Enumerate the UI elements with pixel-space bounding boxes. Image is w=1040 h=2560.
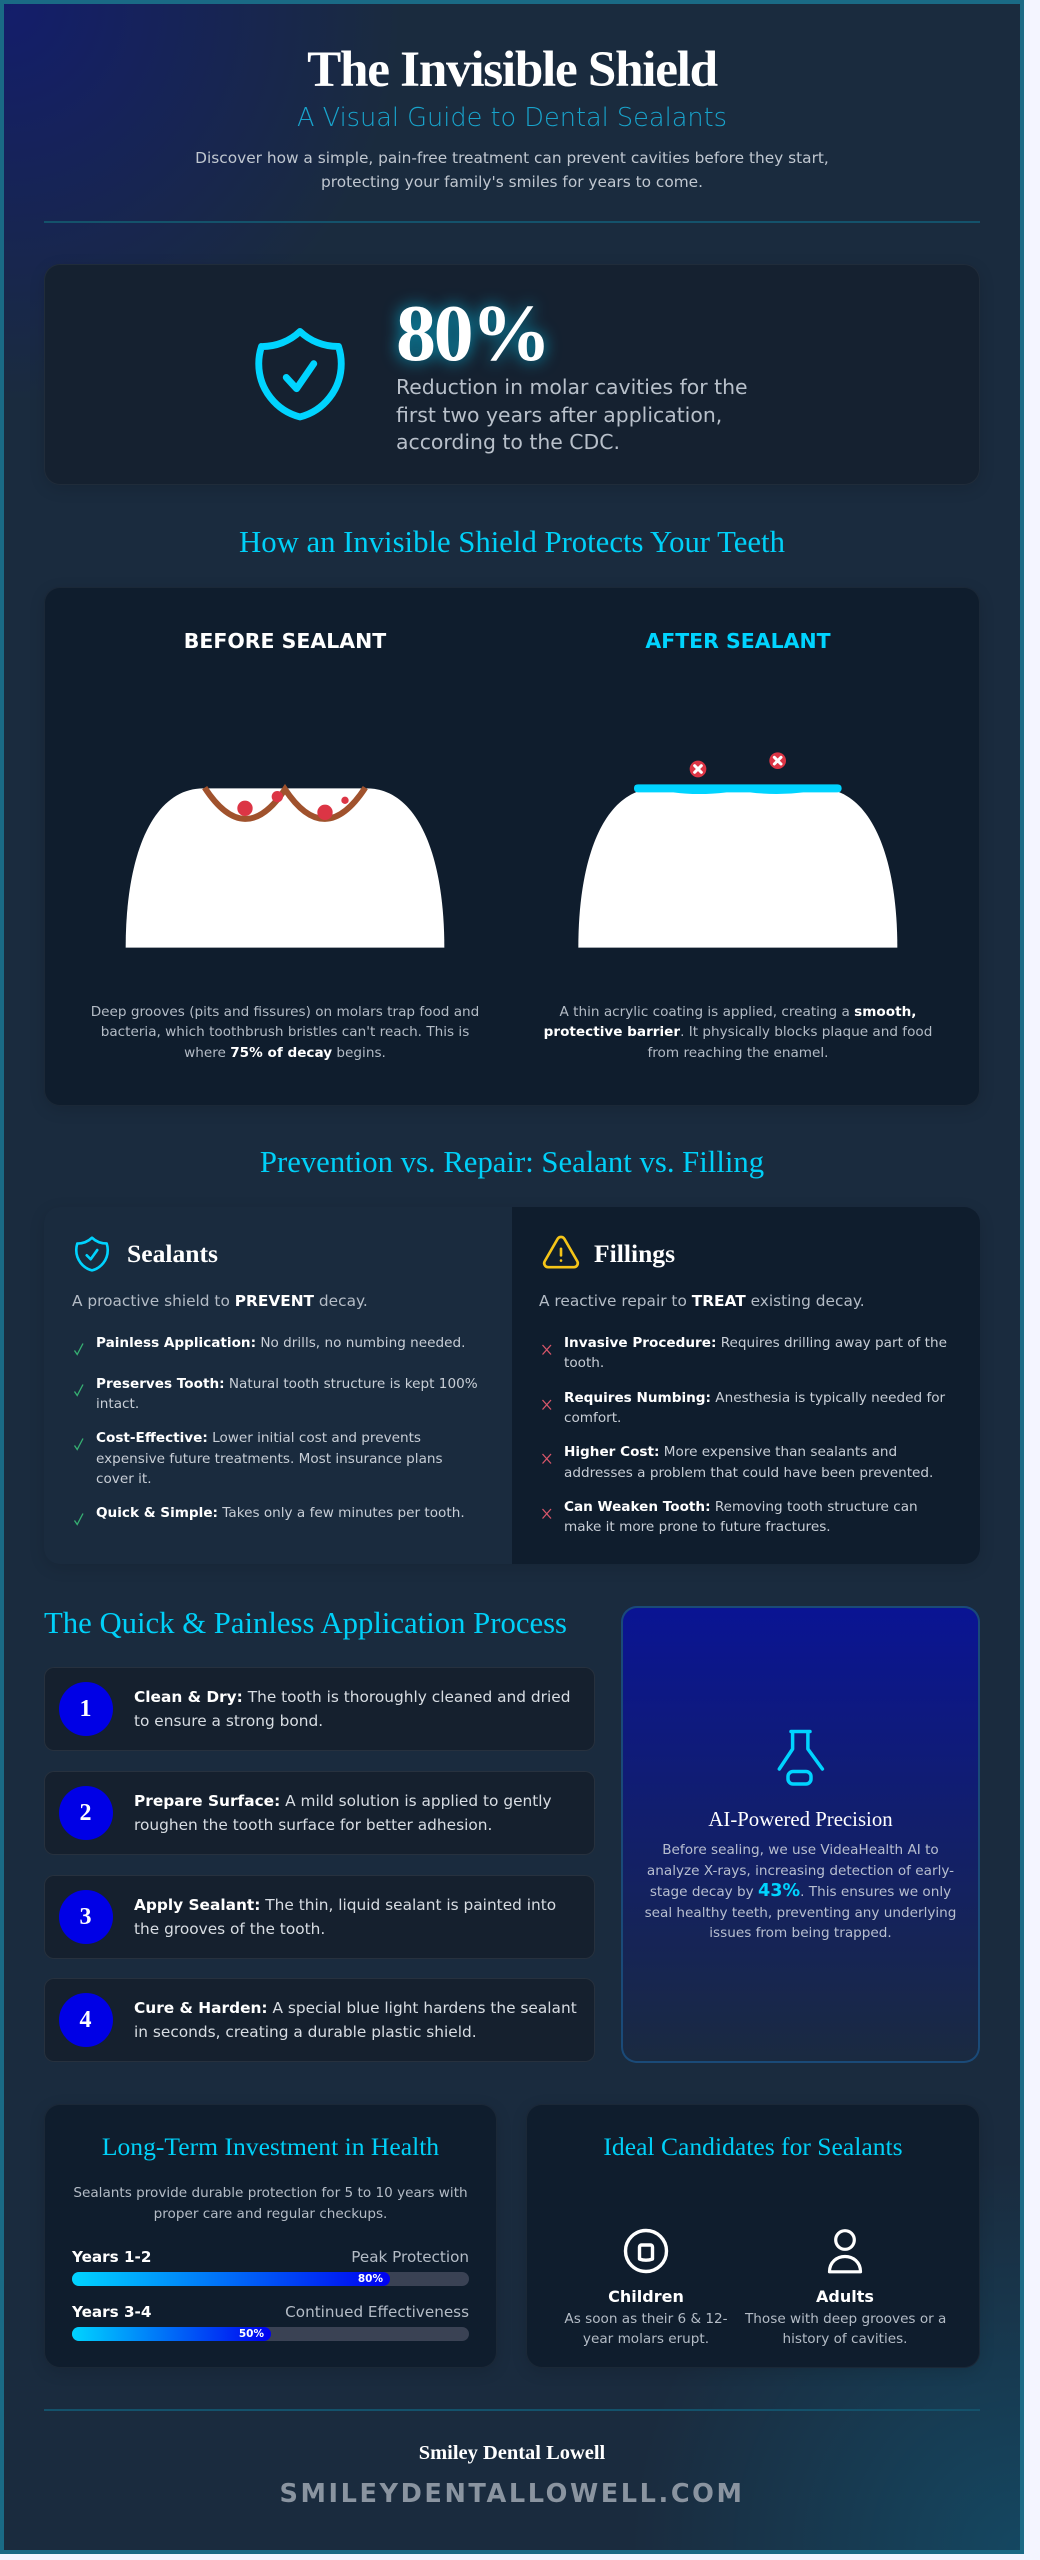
panel: AI-powered precision: [621, 1606, 980, 2063]
step text 1: [134, 1688, 570, 1730]
long-term description: [73, 2185, 468, 2222]
step text 1: to ensure a strong bond.: [134, 1712, 323, 1730]
long-term heading: Long-Term Investment in Health: [102, 2132, 439, 2161]
intro text: protecting your family's smiles for years to come.: [321, 173, 703, 191]
step text 3: [134, 1896, 556, 1938]
filling drawback 2: Requires Numbing: Anesthesia is typically needed for: [564, 1390, 945, 1406]
label: years 1-2: Peak Protection: [351, 2248, 469, 2266]
panel: before and after sealant: [44, 586, 980, 1106]
filling drawback 4: Can Weaken Tooth: Removing tooth structure can: [564, 1499, 918, 1515]
label: years 1-2: Years 1-2: [72, 2248, 151, 2266]
step text 2: roughen the tooth surface for better adhesion.: [134, 1816, 492, 1834]
step number 3: [58, 1890, 112, 1944]
AI card text: stage decay by 43%. This ensures we only: [650, 1881, 951, 1901]
filling drawback 1: Invasive Procedure: Requires drilling away part of the: [564, 1335, 947, 1351]
AI card text: seal healthy teeth, preventing any underlying: [645, 1905, 956, 1921]
heading: prevention vs repair: Prevention vs. Repair: Sealant vs. Filling: [260, 1145, 764, 1179]
column: fillings: [512, 1207, 980, 1564]
children label: Children: [608, 2286, 684, 2306]
before sealant heading: BEFORE SEALANT: [184, 629, 386, 653]
fillings summary: A reactive repair to TREAT existing decay.: [539, 1292, 865, 1310]
caption: after: protective barrier. It physically blocks plaque and food: [544, 1024, 932, 1040]
progress bar: years 1-2, 80%: [72, 2272, 469, 2286]
filling drawback 3: [542, 1444, 933, 1481]
sealant benefit 3: expensive future treatments. Most insurance plans: [96, 1451, 443, 1467]
column: sealants: [72, 1236, 478, 1526]
icon: flask: [778, 1730, 824, 1786]
caption: after: [544, 1004, 932, 1061]
step text 4: Cure & Harden: A special blue light hardens the sealant: [134, 1999, 577, 2017]
illustration: tooth after sealant: [578, 752, 898, 948]
step 2: [44, 1771, 595, 1855]
heading: application process: The Quick & Painless Application Process: [44, 1606, 567, 1640]
step number 4: [58, 1993, 112, 2047]
step number 1: [58, 1682, 112, 1736]
intro text: [195, 149, 829, 191]
sealant benefit 2: intact.: [96, 1396, 139, 1412]
icon: shield with check: [255, 328, 345, 420]
step 1: [44, 1667, 595, 1751]
step text 4: in seconds, creating a durable plastic shield.: [134, 2023, 477, 2041]
AI card text: Before sealing, we use VideaHealth AI to: [662, 1842, 939, 1858]
statistic description: first two years after application,: [396, 403, 722, 427]
step text 3: Apply Sealant: The thin, liquid sealant is painted into: [134, 1896, 556, 1914]
step number 3: 3: [80, 1904, 92, 1930]
filling drawback 2: comfort.: [564, 1410, 621, 1426]
step 4: [44, 1978, 595, 2062]
AI card text: [645, 1842, 956, 1941]
caption: before: Deep grooves (pits and fissures) on molars trap food and: [91, 1004, 479, 1020]
progress bar: years 3-4, 50%: [72, 2327, 469, 2341]
illustration: tooth before sealant: [126, 784, 444, 948]
step number 1: 1: [80, 1696, 92, 1722]
fillings title: Fillings: [594, 1239, 675, 1268]
candidates heading: Ideal Candidates for Sealants: [603, 2132, 903, 2161]
icon: adult: [828, 2229, 862, 2274]
progress bar: years 1-2, 80%: 80%: [358, 2273, 383, 2285]
sealants summary: A proactive shield to PREVENT decay.: [72, 1292, 368, 1310]
title: The Invisible Shield: [307, 41, 717, 98]
children text: year molars erupt.: [583, 2331, 709, 2347]
statistic number: 80%: [396, 290, 549, 378]
icon: warning triangle: [542, 1236, 580, 1268]
progress bar: years 3-4, 50%: 50%: [239, 2328, 264, 2340]
heading: how it protects: How an Invisible Shield Protects Your Teeth: [239, 525, 785, 559]
step text 1: Clean & Dry: The tooth is thoroughly cleaned and dried: [134, 1688, 570, 1706]
adults text: Those with deep grooves or a: [745, 2310, 946, 2326]
children text: [564, 2310, 728, 2347]
caption: after: from reaching the enamel.: [647, 1045, 828, 1061]
sealant benefit 4: Quick & Simple: Takes only a few minutes per tooth.: [96, 1505, 465, 1521]
panel: long-term investment: [44, 2104, 497, 2368]
step number 4: 4: [80, 2007, 92, 2033]
after sealant heading: AFTER SEALANT: [645, 629, 831, 653]
filling drawback 3: Higher Cost: More expensive than sealants and: [564, 1444, 897, 1460]
adults text: history of cavities.: [782, 2331, 908, 2347]
subtitle: A Visual Guide to Dental Sealants: [297, 103, 727, 133]
caption: after: A thin acrylic coating is applied, creating a smooth,: [560, 1004, 916, 1020]
step 3: [44, 1875, 595, 1959]
filling drawback 3: addresses a problem that could have been prevented.: [564, 1465, 933, 1481]
step text 2: Prepare Surface: A mild solution is applied to gently: [134, 1792, 552, 1810]
label: years 3-4: [72, 2303, 469, 2321]
filling drawback 4: [542, 1499, 918, 1535]
caption: before: [91, 1004, 479, 1061]
adults label: Adults: [816, 2286, 874, 2306]
sealant benefit 2: [74, 1376, 478, 1412]
AI card text: issues from being trapped.: [709, 1925, 892, 1941]
step text 2: [134, 1792, 552, 1834]
step number 2: [58, 1786, 112, 1840]
candidate: children: [564, 2228, 728, 2347]
panel: comparison sealants vs fillings: [44, 1207, 980, 1564]
sealant benefit 3: [74, 1430, 443, 1487]
intro text: Discover how a simple, pain-free treatment can prevent cavities before they start,: [195, 149, 829, 167]
filling drawback 4: make it more prone to future fractures.: [564, 1519, 831, 1535]
children text: As soon as their 6 & 12-: [564, 2310, 728, 2326]
candidate: adults: [744, 2229, 946, 2347]
step text 3: the grooves of the tooth.: [134, 1920, 325, 1938]
adults text: [744, 2310, 946, 2347]
step number 2: 2: [80, 1800, 92, 1826]
panel: ideal candidates: [526, 2104, 980, 2368]
AI card heading: AI-Powered Precision: [708, 1808, 893, 1831]
caption: before: where 75% of decay begins.: [184, 1045, 386, 1061]
panel: 80% statistic: [44, 264, 980, 485]
long-term description: proper care and regular checkups.: [154, 2206, 387, 2222]
sealant benefit 2: Preserves Tooth: Natural tooth structure is kept 100%: [96, 1376, 478, 1392]
step text 4: [134, 1999, 577, 2041]
label: years 3-4: Continued Effectiveness: [285, 2303, 469, 2321]
sealant benefit 3: Cost-Effective: Lower initial cost and prevents: [96, 1430, 421, 1446]
AI card text: analyze X-rays, increasing detection of early-: [647, 1863, 954, 1879]
sealant benefit 1: Painless Application: No drills, no numbing needed.: [96, 1335, 465, 1351]
icon: child: [624, 2228, 668, 2274]
statistic description: [396, 375, 748, 454]
label: years 1-2: [72, 2248, 469, 2266]
filling drawback 1: tooth.: [564, 1355, 604, 1371]
filling drawback 1: [542, 1335, 947, 1371]
sealants title: Sealants: [127, 1239, 218, 1268]
icon: sealants shield: [74, 1236, 110, 1272]
sealant benefit 3: cover it.: [96, 1471, 152, 1487]
statistic description: according to the CDC.: [396, 430, 620, 454]
filling drawback 2: [542, 1390, 946, 1426]
statistic description: Reduction in molar cavities for the: [396, 375, 748, 399]
caption: before: bacteria, which toothbrush bristles can't reach. This is: [101, 1024, 469, 1040]
footer: practice name: Smiley Dental Lowell: [419, 2442, 605, 2464]
footer: website: SMILEYDENTALLOWELL.COM: [279, 2479, 745, 2509]
label: years 3-4: Years 3-4: [72, 2303, 151, 2321]
long-term description: Sealants provide durable protection for 5 to 10 years with: [73, 2185, 468, 2201]
